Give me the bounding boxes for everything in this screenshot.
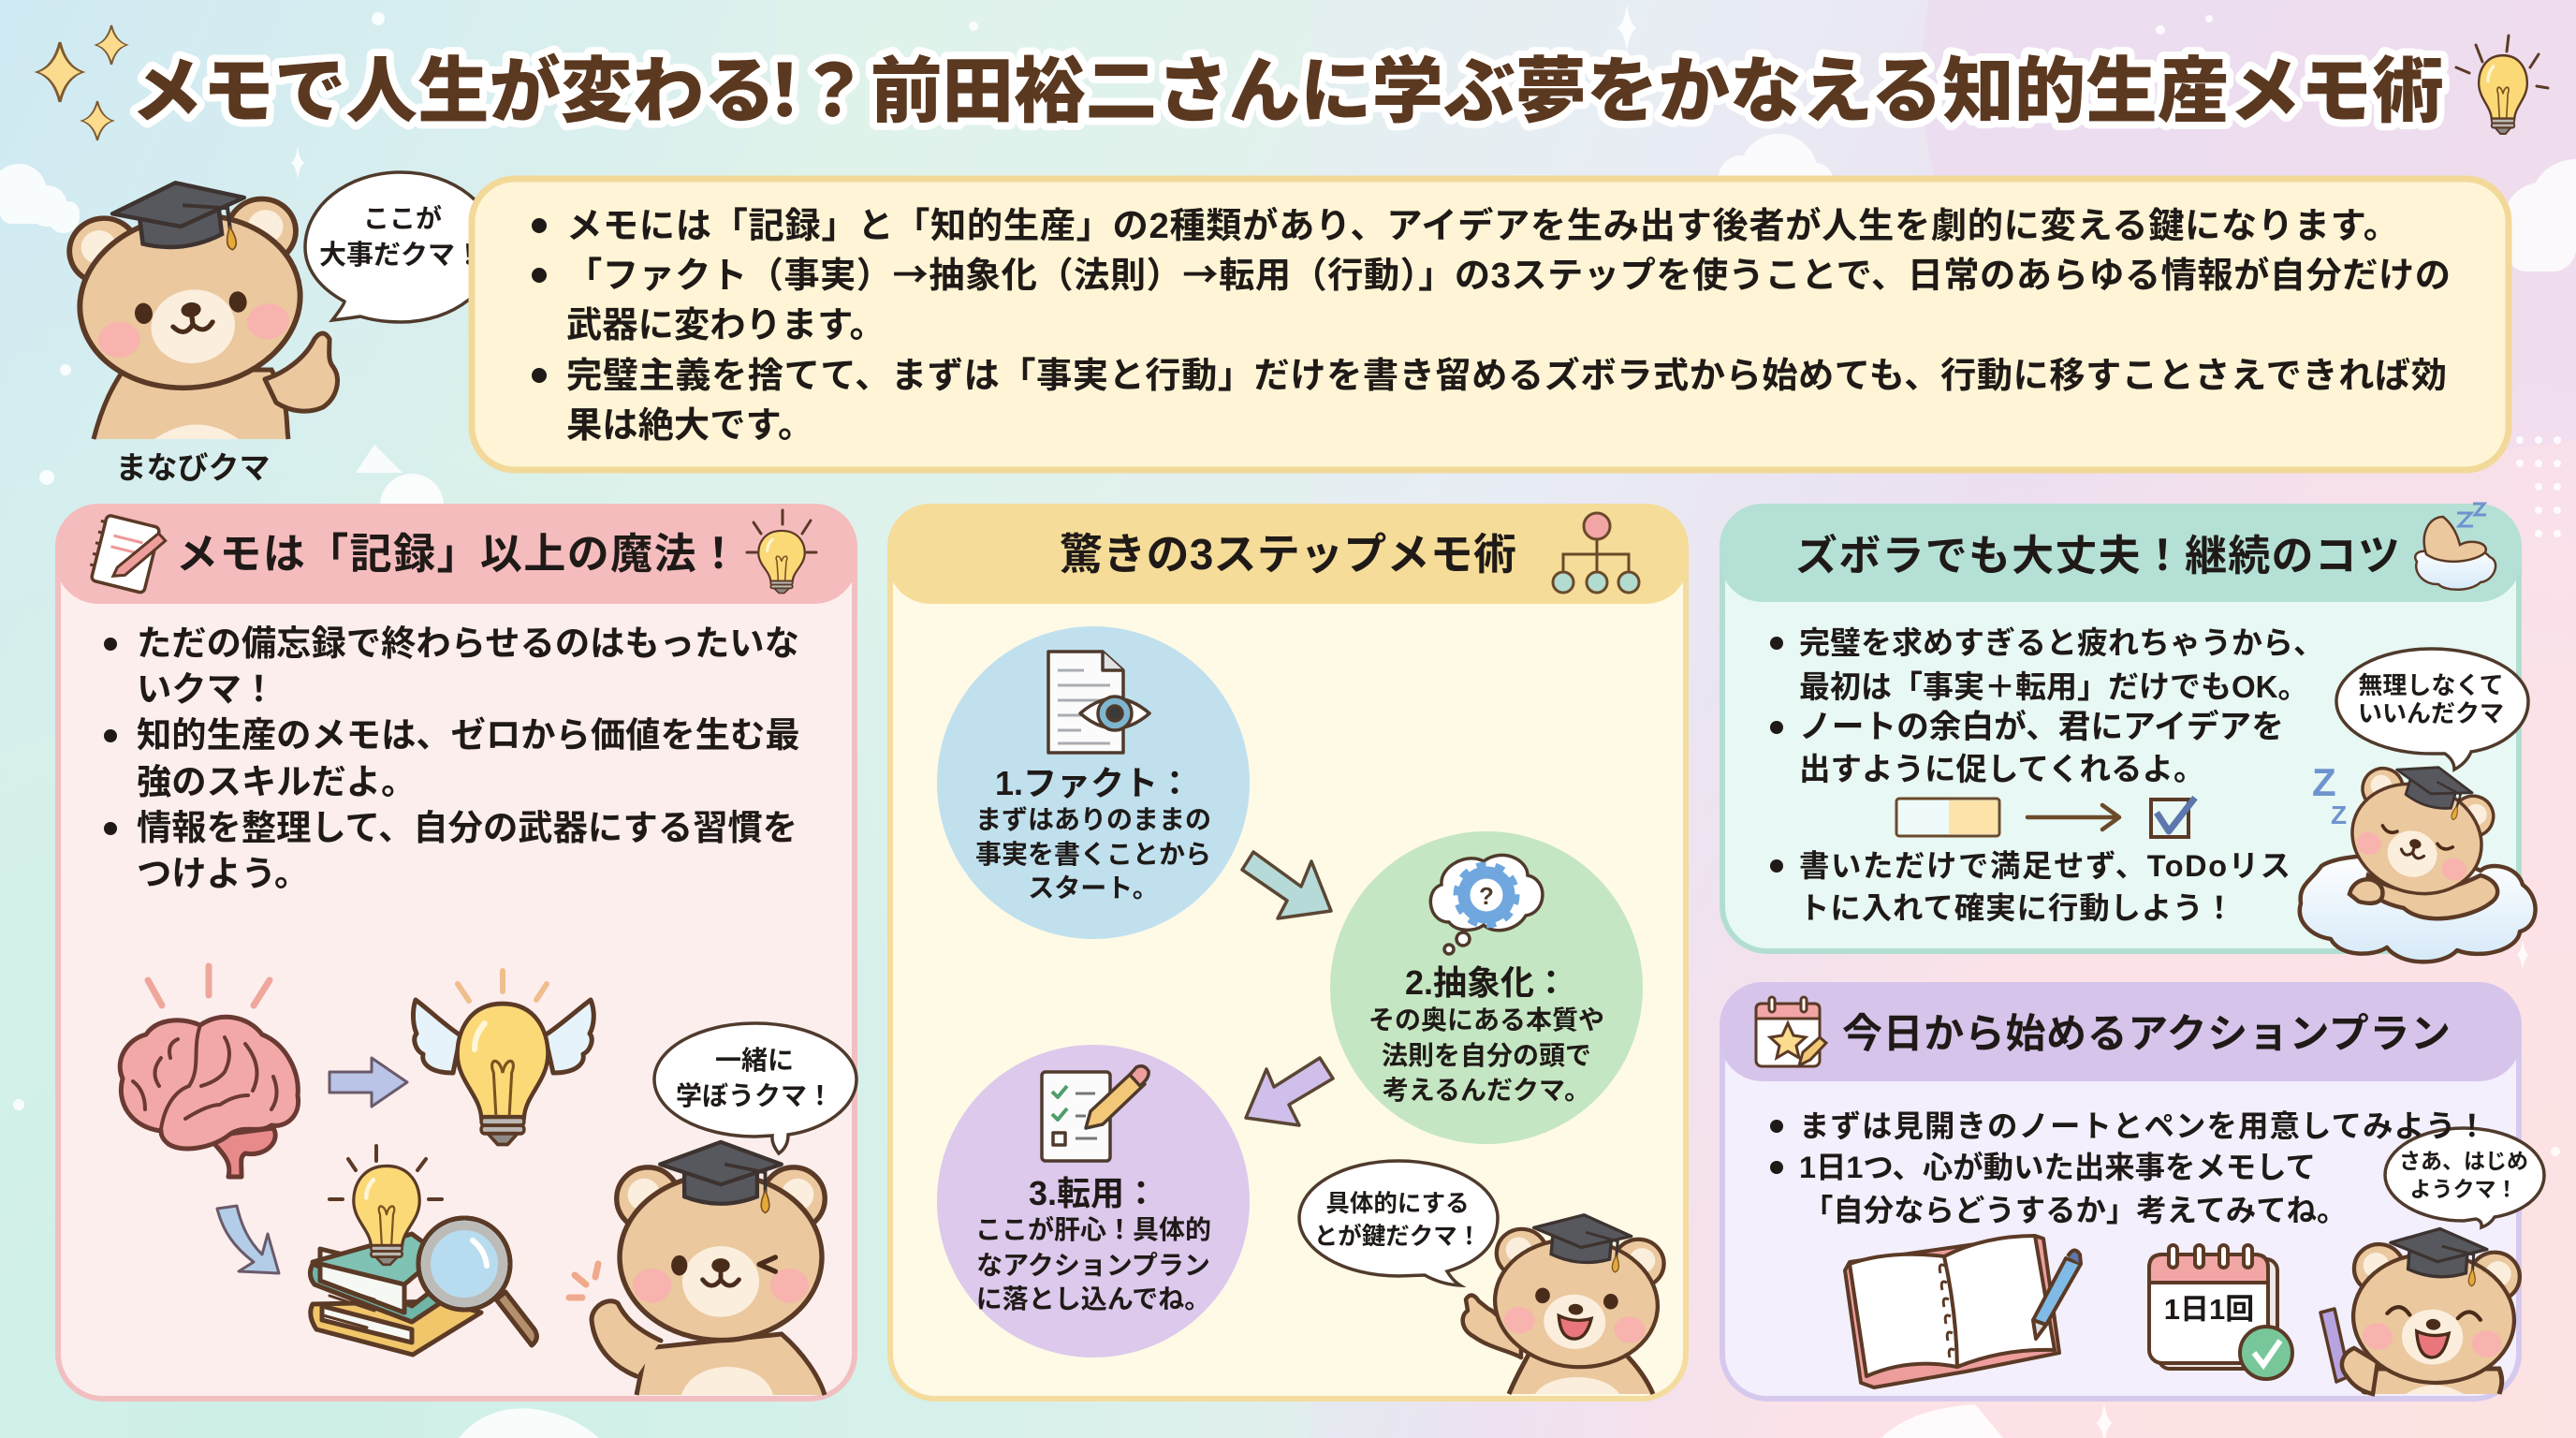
bear head [1487, 1208, 1668, 1374]
bear arm [592, 1301, 661, 1376]
panel: three step memo [887, 504, 1689, 1399]
bear hand [265, 333, 337, 411]
panel header [55, 504, 857, 604]
character: pointing bear [1463, 1208, 1668, 1394]
body text: ノートの余白が、君にアイデアを [1799, 708, 2284, 745]
arrow: step 2 to 3 [1246, 1058, 1333, 1125]
bear body [637, 1334, 825, 1395]
sleep letters: Z [2331, 800, 2347, 829]
speech bubble: ここが大事だクマ [305, 172, 496, 322]
heading: 今日から始めるアクションプラン [1842, 1012, 2451, 1057]
speech bubble: ここが大事だクマ: 大事だクマ！ [319, 240, 482, 271]
speech bubble: 具体的にするとが鍵だクマ: とが鍵だクマ！ [1314, 1223, 1481, 1250]
step 1 text: スタート。 [1028, 873, 1159, 902]
bear hand [1463, 1295, 1521, 1357]
body text: 最初は「事実＋転用」だけでもOK。 [1799, 669, 2308, 704]
character name: まなびクマ [116, 450, 270, 485]
speech bubble: 無理しなくていいんだクマ: 無理しなくて [2358, 671, 2504, 699]
step 2 text [1368, 963, 1604, 1105]
body text: 強のスキルだよ。 [137, 762, 416, 801]
speech bubble: さあ、はじめようクマ [2385, 1128, 2544, 1227]
step 3 text [975, 1174, 1211, 1313]
summary bullets: 果は絶大です。 [566, 405, 813, 446]
panel: memo is magic [55, 504, 857, 1399]
summary bullets: 「ファクト（事実）→抽象化（法則）→転用（行動）」の3ステップを使うことで、日常のあらゆる情報が自分だけの [566, 247, 2451, 299]
bear head [617, 1142, 825, 1341]
bear body [94, 370, 288, 439]
panel: summary [472, 179, 2509, 470]
step 3 text: に落とし込んでね。 [976, 1284, 1210, 1313]
step 3 text: ここが肝心！具体的 [975, 1214, 1211, 1244]
bear body [1509, 1353, 1653, 1394]
icon: light bulb [747, 510, 816, 594]
cloud [2300, 856, 2536, 961]
panel header [1720, 982, 2522, 1081]
body text: 完璧を求めすぎると疲れちゃうから、 [1799, 625, 2324, 660]
sleep letters [2312, 760, 2347, 829]
icon: bear relaxing on cloud [2415, 504, 2496, 590]
dots decoration [2516, 436, 2561, 537]
summary bullets: 武器に変わります。 [566, 305, 886, 345]
bear head [63, 169, 314, 401]
body text [104, 624, 800, 893]
step 1 text: まずはありのままの [975, 805, 1211, 834]
body text: 書いただけで満足せず、ToDoリス [1799, 849, 2291, 883]
icon: document with eye [1048, 652, 1149, 753]
bear body [2367, 875, 2497, 918]
summary bullets: 完璧主義を捨てて、まずは「事実と行動」だけを書き留めるズボラ式から始めても、行動に移すことさえできれば効 [566, 356, 2447, 396]
step 1 circle [937, 626, 1250, 939]
character: sleeping bear on cloud [2300, 748, 2536, 961]
step 1 text: 1.ファクト： [995, 764, 1192, 802]
step 2 text: 考えるんだクマ。 [1383, 1076, 1590, 1105]
pen [2320, 1309, 2349, 1382]
bear body [2364, 1369, 2502, 1394]
speech bubble: 無理しなくていいんだクマ: いいんだクマ [2358, 699, 2504, 727]
character: waving bear [569, 1142, 825, 1395]
body text: まずは見開きのノートとペンを用意してみよう！ [1799, 1109, 2487, 1143]
step 3 text: 3.転用： [1029, 1174, 1158, 1212]
speech bubble: 一緒に学ぼうクマ: 学ぼうクマ！ [676, 1081, 833, 1110]
bear head [2336, 748, 2503, 910]
arrow: step 1 to 2 [1242, 852, 1331, 918]
icon: calendar star [1756, 997, 1826, 1066]
bear head [2347, 1223, 2523, 1388]
title: メモで人生が変わる [131, 52, 775, 132]
sleep letters: Z [2312, 760, 2336, 804]
title: ！ [749, 52, 820, 132]
icon: hierarchy [1553, 513, 1639, 593]
icon: title light bulb [2456, 36, 2548, 134]
step 3 circle [937, 1045, 1250, 1357]
body text [1770, 625, 2324, 925]
panel: action plan: 1日1回 [2164, 1293, 2254, 1326]
icon: brain [120, 966, 299, 1177]
bear paw [2349, 879, 2382, 903]
icon: thought cloud with gear [1430, 855, 1543, 954]
panel header [887, 504, 1689, 604]
summary bullets: メモには「記録」と「知的生産」の2種類があり、アイデアを生み出す後者が人生を劇的に変える鍵になります。 [566, 205, 2399, 246]
speech bubble: さあ、はじめようクマ: ようクマ！ [2409, 1177, 2518, 1201]
body text: 出すように促してくれるよ。 [1799, 753, 2205, 787]
body text: 1日1つ、心が動いた出来事をメモして [1799, 1150, 2316, 1184]
body text: いクマ！ [137, 669, 276, 709]
character: teaching bear [63, 169, 337, 439]
icon: sparkles [37, 25, 127, 140]
icon: books, bulb and magnifier [310, 1146, 536, 1355]
panel header [1720, 504, 2522, 602]
step 3 text: なアクションプラン [976, 1251, 1210, 1280]
icon: winged light bulb [413, 971, 593, 1144]
panel: lazy tips [1720, 504, 2536, 961]
panel: action plan [1720, 982, 2544, 1399]
body text: 知的生産のメモは、ゼロから価値を生む最 [137, 715, 800, 755]
body text: つけよう。 [137, 854, 309, 893]
title: ？ [798, 52, 869, 132]
icon: notebook [86, 514, 168, 595]
icon: checklist with pencil [1042, 1066, 1149, 1161]
icon: open notebook and pen [1845, 1236, 2081, 1387]
step 1 text: 事実を書くことから [975, 840, 1211, 869]
heading: メモは「記録」以上の魔法！ [176, 530, 739, 578]
icon: calendar 1日1回 [2149, 1245, 2292, 1379]
step 1 text [975, 764, 1211, 902]
body text: 情報を整理して、自分の武器にする習慣を [137, 808, 798, 847]
speech bubble: 一緒に学ぼうクマ: 一緒に [715, 1046, 794, 1075]
arrow: brain to bulb [329, 1058, 407, 1107]
speech bubble: 具体的にするとが鍵だクマ [1299, 1161, 1498, 1285]
body text: ただの備忘録で終わらせるのはもったいな [137, 624, 799, 663]
title: 前田裕二さんに学ぶ夢をかなえる知的生産メモ術 [871, 52, 2444, 132]
step 2 circle [1330, 831, 1643, 1144]
step 2 circle: ? [1479, 882, 1494, 910]
step 2 text: 2.抽象化： [1405, 963, 1568, 1002]
speech bubble: 一緒に学ぼうクマ [654, 1023, 856, 1153]
speech bubble: 無理しなくていいんだクマ [2336, 649, 2528, 770]
character: bear with pen [2320, 1223, 2523, 1394]
arrow: brain to books [217, 1206, 279, 1273]
speech bubble: さあ、はじめようクマ: さあ、はじめ [2399, 1149, 2528, 1173]
body text: 「自分ならどうするか」考えてみてね。 [1803, 1194, 2347, 1227]
body text [1770, 1109, 2487, 1227]
bear arm [2342, 1348, 2378, 1394]
heading: 驚きの3ステップメモ術 [1060, 530, 1516, 579]
body text: トに入れて確実に行動しよう！ [1799, 891, 2234, 925]
speech bubble: ここが大事だクマ: ここが [363, 203, 442, 233]
heading: ズボラでも大丈夫！継続のコツ [1795, 532, 2400, 580]
icon: note to checkbox [1896, 798, 2195, 837]
speech bubble: 具体的にするとが鍵だクマ: 具体的にする [1325, 1191, 1470, 1217]
step 2 text: 法則を自分の頭で [1382, 1041, 1591, 1070]
motion ticks [569, 1264, 598, 1298]
summary bullets [532, 205, 2451, 446]
step 2 text: その奥にある本質や [1368, 1005, 1604, 1034]
